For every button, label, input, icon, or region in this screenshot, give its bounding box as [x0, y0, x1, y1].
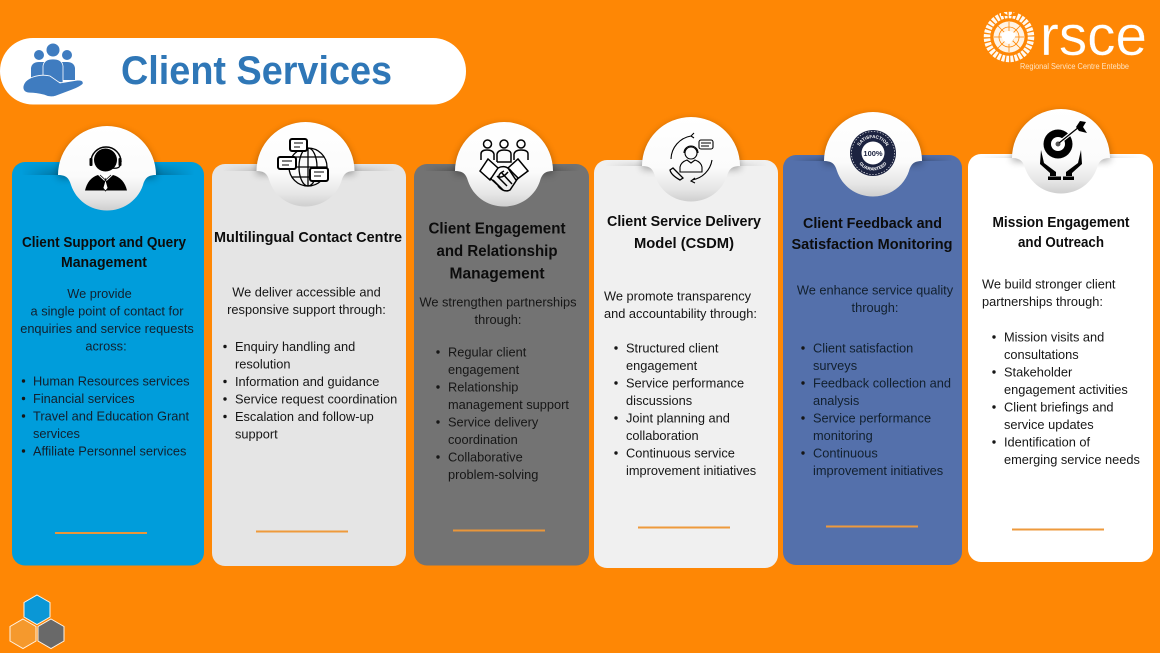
bullet list: Client satisfaction: [813, 340, 913, 356]
heading: [992, 215, 1130, 251]
icon holder: [824, 112, 922, 196]
bullet list: Identification of: [1004, 434, 1091, 450]
heading: Multilingual Contact Centre: [214, 230, 402, 246]
bullet list: Continuous service: [626, 446, 735, 460]
logo wordmark: rsce: [1040, 4, 1147, 68]
intro text: [604, 288, 757, 321]
bullet list: engagement: [448, 362, 520, 377]
bullet list: improvement initiatives: [813, 463, 943, 478]
intro text: partnerships through:: [982, 294, 1103, 309]
bullet list: discussions: [626, 393, 692, 408]
logo: rsce: [987, 4, 1147, 71]
bullet list: Stakeholder: [1004, 364, 1073, 380]
heading: and Outreach: [1018, 235, 1104, 251]
icon holder: [58, 126, 156, 210]
heading: Model (CSDM): [634, 235, 734, 252]
bullet list: services: [33, 426, 80, 441]
bullet list: service updates: [1004, 417, 1094, 432]
intro text: We build stronger client: [982, 276, 1116, 292]
card body: [783, 155, 962, 565]
intro text: We provide: [67, 286, 132, 301]
icon: hexagon cluster: [10, 595, 64, 648]
bullet list: problem-solving: [448, 467, 538, 482]
card body: [594, 160, 778, 568]
heading: [792, 215, 952, 253]
intro text: We promote transparency: [604, 288, 752, 304]
bullet list: Service request coordination: [235, 392, 397, 406]
icon: globe with speech bubbles: [278, 139, 328, 186]
bullet list: Continuous: [813, 446, 878, 460]
icon holder: [1012, 109, 1110, 194]
bullet list: Human Resources services: [33, 374, 189, 388]
logo subtitle: Regional Service Centre Entebbe: [1020, 62, 1129, 71]
icon: people and handshake: [480, 140, 528, 191]
bullet list: engagement: [626, 358, 698, 373]
bullet list: Relationship: [448, 380, 518, 394]
panel: Client Feedback and Satisfaction Monitoring: [783, 110, 962, 565]
icon holder: [642, 117, 740, 202]
bullet list: Client briefings and: [1004, 400, 1114, 414]
bullet list: engagement activities: [1004, 382, 1128, 397]
intro text: through:: [852, 300, 898, 315]
intro text: [20, 286, 194, 354]
bullet list: Feedback collection and: [813, 376, 951, 390]
panel: Client Support and Query Management: [12, 126, 204, 566]
intro text: [227, 284, 386, 317]
bullet list: Joint planning and: [626, 410, 730, 426]
bullet list: consultations: [1004, 347, 1079, 362]
heading: [428, 220, 566, 282]
bullet list: Service performance: [813, 410, 931, 426]
intro text: enquiries and service requests: [20, 321, 194, 336]
intro text: We strengthen partnerships: [420, 294, 576, 310]
card body: [212, 164, 406, 566]
bullet list: surveys: [813, 358, 857, 373]
bullet list: Information and guidance: [235, 374, 379, 389]
intro text: We deliver accessible and: [232, 284, 381, 300]
bullet list: Regular client: [448, 344, 527, 360]
panel: Multilingual Contact Centre: [212, 122, 406, 566]
heading: and Relationship: [436, 243, 558, 260]
heading: [22, 235, 186, 271]
icon: satisfaction badge: GUARANTEED: [860, 162, 886, 170]
bullet list: [223, 339, 397, 442]
intro text: across:: [85, 338, 127, 354]
heading: Satisfaction Monitoring: [792, 236, 952, 253]
icon: service agent with arrows: [670, 133, 713, 183]
intro text: [420, 294, 576, 327]
heading: Client Feedback and: [803, 215, 942, 232]
bullet list: resolution: [235, 356, 290, 372]
intro text: and accountability through:: [604, 306, 757, 321]
bullet list: collaboration: [626, 428, 699, 443]
heading: Client Engagement: [428, 220, 566, 238]
heading: Client Service Delivery: [607, 213, 762, 230]
bullet list: support: [235, 426, 278, 442]
heading: Management: [61, 255, 147, 271]
icon: group held in hand: [23, 44, 83, 97]
bullet list: improvement initiatives: [626, 463, 756, 478]
bullet list: [801, 340, 951, 478]
bullet list: Financial services: [33, 391, 135, 406]
bullet list: Mission visits and: [1004, 330, 1104, 344]
card body: [968, 154, 1153, 562]
bullet list: emerging service needs: [1004, 452, 1140, 467]
bullet list: management support: [448, 397, 569, 412]
intro text: [797, 282, 954, 315]
icon: satisfaction badge: [850, 130, 896, 176]
banner pill: [0, 38, 466, 104]
card body: [12, 162, 204, 566]
panel: Mission Engagement and Outreach: [968, 109, 1153, 562]
icon: UN emblem: [987, 11, 1031, 59]
intro text: through:: [475, 312, 521, 327]
title text: Client Services: [121, 49, 392, 93]
icon: satisfaction badge: 100%: [863, 149, 883, 158]
bullet list: analysis: [813, 393, 859, 408]
intro text: We enhance service quality: [797, 282, 954, 298]
panel: Client Service Delivery Model (CSDM): [594, 117, 778, 568]
bullet list: Structured client: [626, 340, 719, 356]
heading: Mission Engagement: [992, 215, 1130, 231]
intro text: responsive support through:: [227, 302, 386, 317]
bullet list: Enquiry handling and: [235, 339, 355, 354]
heading: Management: [450, 266, 545, 282]
bullet list: Service performance: [626, 376, 744, 390]
bullet list: monitoring: [813, 428, 873, 443]
icon: target in hands: [1040, 121, 1087, 180]
bullet list: [436, 344, 569, 482]
bullet list: [992, 330, 1140, 467]
bullet list: Escalation and follow-up: [235, 409, 374, 424]
bullet list: Collaborative: [448, 450, 523, 464]
icon: satisfaction badge: SATISFACTION: [857, 135, 889, 146]
heading: Client Support and Query: [22, 235, 186, 251]
bullet list: Affiliate Personnel services: [33, 444, 186, 458]
bullet list: coordination: [448, 432, 518, 447]
icon holder: [455, 122, 553, 206]
bullet list: [22, 374, 189, 458]
intro text: [982, 276, 1116, 309]
bullet list: Service delivery: [448, 414, 539, 430]
bullet list: [614, 340, 756, 478]
panel: Client Engagement and Relationship Management: [414, 122, 589, 566]
icon: headset agent: [85, 147, 127, 191]
card body: [414, 164, 589, 566]
title banner: [0, 38, 466, 104]
heading: [607, 213, 762, 252]
intro text: a single point of contact for: [31, 304, 184, 318]
icon holder: [256, 122, 354, 206]
bullet list: Travel and Education Grant: [33, 408, 189, 424]
